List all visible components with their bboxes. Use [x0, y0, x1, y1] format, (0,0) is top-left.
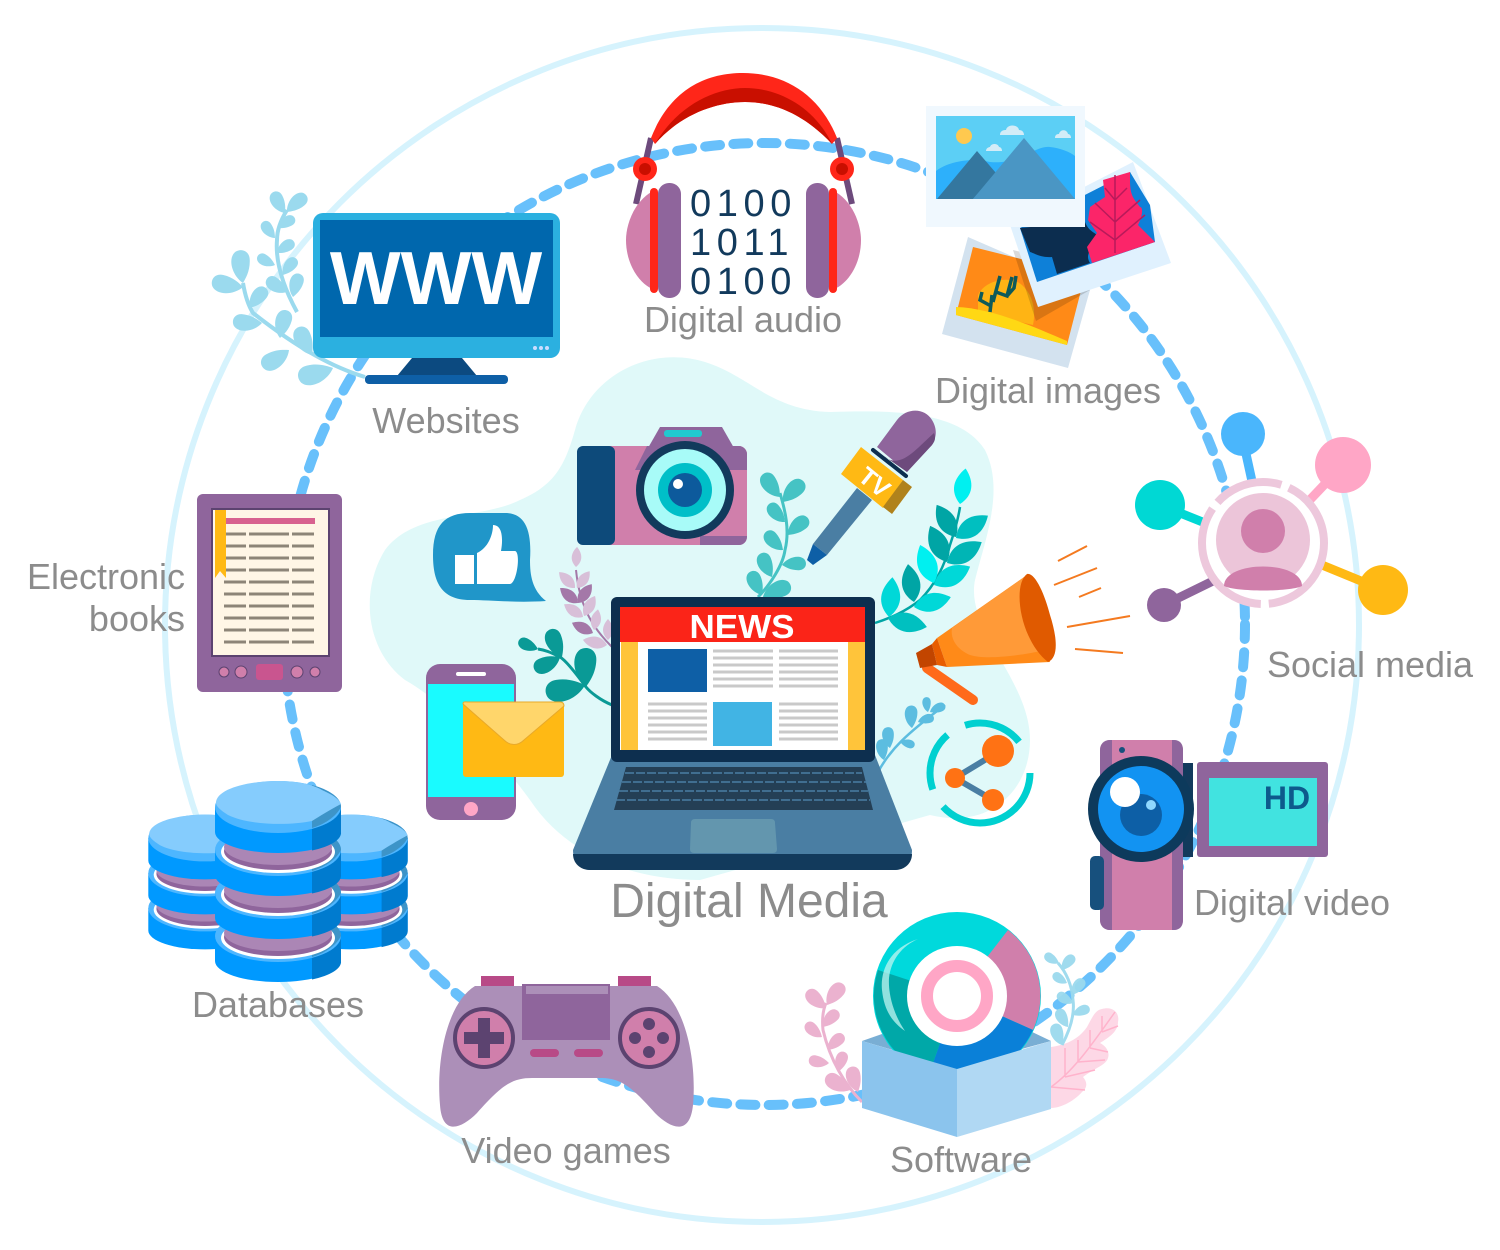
- teal branch right: [875, 467, 993, 636]
- label: websites: Websites: [372, 400, 520, 441]
- central blob background: [370, 357, 1030, 880]
- label: digital video: Digital video: [1194, 882, 1390, 923]
- icon: news laptop: NEWS: [690, 608, 794, 645]
- binary digits: 1011: [690, 222, 794, 264]
- label: databases: Databases: [192, 984, 364, 1025]
- label: social media: Social media: [1267, 644, 1474, 685]
- icon: digital video camera: HD: [1264, 780, 1310, 816]
- sprig behind monitor: [211, 189, 365, 389]
- binary digits: [690, 183, 797, 303]
- label: digital images: Digital images: [935, 370, 1161, 411]
- blue sprig: [1042, 951, 1092, 1047]
- icon: databases: [148, 781, 408, 982]
- pink sprig: [802, 979, 866, 1102]
- icon: game controller: [439, 976, 694, 1127]
- icon: TV microphone: TV: [853, 462, 896, 504]
- icon: electronic book: [197, 494, 342, 692]
- binary digits: 0100: [690, 183, 797, 225]
- title: Digital Media: [610, 875, 888, 928]
- label: electronic books: books: [89, 598, 185, 639]
- purple sprig: [555, 547, 613, 651]
- teal sprig centre: [743, 469, 812, 605]
- binary digits: 0100: [690, 261, 797, 303]
- icon: digital video camera: [1088, 740, 1328, 930]
- icon: software box with disc: [802, 912, 1118, 1137]
- label: video games: Video games: [461, 1130, 671, 1171]
- dashed ring: [283, 143, 1245, 1105]
- icon: websites monitor: WWW: [330, 236, 542, 320]
- blue sprig lower right: [875, 696, 947, 772]
- icon: news laptop: [573, 597, 912, 870]
- icon: megaphone: [916, 546, 1130, 700]
- label: software: Software: [890, 1139, 1032, 1180]
- icon: sprigs near laptop: [516, 467, 993, 772]
- pink leaf: [1051, 1008, 1118, 1108]
- teal sprig left: [516, 626, 612, 705]
- label: digital audio: Digital audio: [644, 299, 842, 340]
- icon: TV microphone: [807, 411, 936, 565]
- icon: photo camera: [577, 427, 747, 545]
- icon: thumbs up bubble: [433, 513, 546, 602]
- icon: social media network: [1135, 412, 1408, 622]
- icon: digital images: [926, 106, 1171, 368]
- label: electronic books: [27, 556, 185, 639]
- icon: headphones: [626, 73, 861, 303]
- icon: websites monitor: [211, 189, 560, 389]
- icon: smartphone with email: [426, 664, 564, 820]
- icon: share symbol: [930, 723, 1030, 823]
- label: electronic books: Electronic: [27, 556, 185, 597]
- outer ring: [165, 28, 1359, 1222]
- disc: [873, 912, 1041, 1080]
